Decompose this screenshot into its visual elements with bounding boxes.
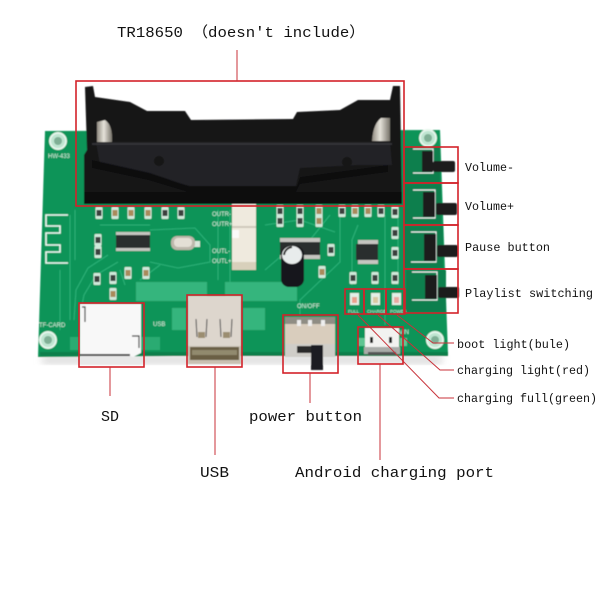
callout: battery holder — [76, 50, 404, 206]
silkscreen labels: OUTR- — [212, 212, 231, 218]
circuit board — [38, 86, 459, 370]
silkscreen labels: FULL — [348, 309, 360, 314]
callout: playlist switching: Playlist switching — [465, 287, 593, 301]
silkscreen labels: OUTL- — [212, 249, 230, 255]
crystal — [171, 236, 200, 250]
callout: led group — [345, 289, 405, 314]
battery contacts — [97, 120, 112, 142]
callout: pause button: Pause button — [465, 241, 550, 255]
callout: sd slot: SD — [101, 409, 119, 426]
title: TR18650 （doesn't include） — [117, 24, 365, 42]
silkscreen labels: USB — [153, 322, 165, 328]
chip: charger — [356, 240, 378, 264]
mounting holes — [40, 130, 443, 348]
antenna — [46, 215, 68, 263]
callout: playlist switching — [404, 269, 593, 313]
tact buttons — [404, 147, 459, 312]
silkscreen labels: HW-433 — [48, 154, 71, 160]
pcb — [38, 130, 448, 357]
capacitor — [281, 246, 304, 287]
callout: charging full: charging full(green) — [457, 392, 597, 406]
slide power switch — [285, 317, 335, 370]
callout: charging light — [378, 315, 590, 378]
callout: power button — [249, 315, 362, 426]
callout: charging light: charging light(red) — [457, 364, 590, 378]
usb port — [188, 296, 241, 364]
callout: pause button — [404, 225, 550, 269]
sd card slot — [80, 304, 141, 365]
callout: volume plus: Volume+ — [465, 200, 514, 214]
led indicators — [350, 293, 401, 305]
button 4 — [406, 270, 459, 312]
button 1 — [404, 147, 455, 183]
pcb traces — [60, 210, 398, 330]
silkscreen labels: VIN — [399, 330, 409, 336]
callout: volume minus — [404, 147, 514, 183]
silkscreen labels: TF-CARD — [39, 323, 66, 329]
button 2 — [404, 184, 457, 224]
silkscreen labels: CHARGE — [367, 309, 386, 314]
surface components — [94, 205, 398, 300]
callout: volume plus — [404, 183, 514, 225]
silkscreen labels: POWER — [390, 309, 408, 314]
callout: boot light: boot light(bule) — [457, 338, 570, 352]
white speaker connector — [232, 191, 256, 270]
chip: audio decoder — [116, 232, 150, 251]
silkscreen labels — [39, 154, 409, 336]
callout: usb port: USB — [200, 465, 229, 482]
callout: boot light — [397, 315, 570, 352]
silkscreen labels: ON/OFF — [297, 304, 320, 310]
copper pads — [70, 282, 297, 350]
silkscreen labels: OUTR+ — [212, 222, 233, 228]
battery holder — [84, 86, 402, 204]
button 3 — [404, 226, 458, 268]
callout: charging full — [358, 315, 597, 406]
silkscreen labels: OUTL+ — [212, 259, 232, 265]
callout: sd slot — [79, 303, 144, 426]
micro usb port — [358, 328, 407, 355]
callout: usb port — [187, 295, 242, 482]
board shadow — [42, 356, 442, 364]
callout: android charging port: Android charging port — [295, 465, 494, 482]
callout: volume minus: Volume- — [465, 161, 514, 175]
chip: amplifier — [280, 238, 320, 259]
callout: power button: power button — [249, 409, 362, 426]
callout: android charging port — [295, 327, 494, 482]
